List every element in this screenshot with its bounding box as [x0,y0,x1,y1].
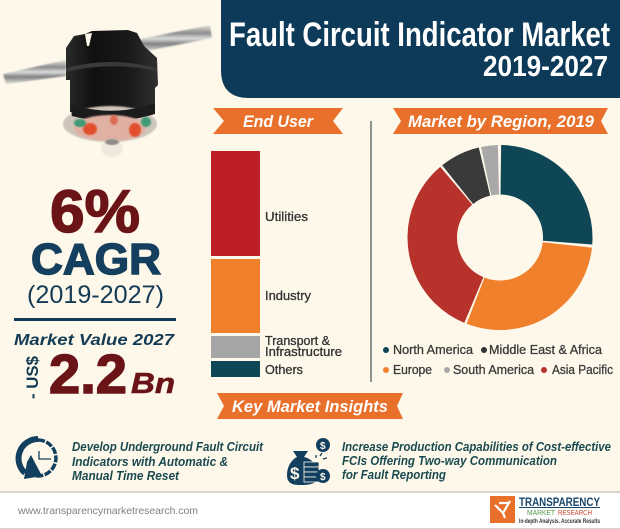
title text [229,16,610,83]
donut legend: Middle East & Africa [489,342,603,357]
stat: market value 2027 [14,332,175,405]
insight text: underground: Manual Time Reset [72,468,180,483]
stat: 6% CAGR: CAGR [31,235,161,284]
stat: 6% CAGR [27,178,164,309]
bar labels [265,210,342,377]
heading ribbon: End User [213,108,343,134]
donut legend: Europe [393,362,432,377]
stat: market value 2027: Market Value 2027 [14,332,175,349]
stat: 6% CAGR: 6% [50,178,140,245]
donut legend: Asia Pacific [552,362,613,377]
insight text: production capabilities: FCIs Offering Two-way Communication [342,453,557,468]
stat: market value 2027: 2.2 [49,343,127,405]
heading ribbon: Key Market Insights [217,393,403,419]
heading ribbon: Market by Region: Market by Region, 2019 [408,112,595,131]
device photo: fault circuit indicator [3,25,212,157]
bar labels: Infrastructure [265,345,342,359]
insight text: production capabilities: for Fault Reporting [342,467,446,482]
logo: TRANSPARENCY [519,495,600,509]
icon: money bag and coins [287,438,330,485]
bar labels: Utilities [265,210,308,224]
heading ribbon: Key Market Insights: Key Market Insights [232,397,388,416]
icon: money bag and coins: $ [320,472,326,483]
insight text: underground [72,439,264,483]
logo: MARKET [527,510,556,517]
icon: money bag and coins: $ [290,464,300,483]
bar labels: Industry [265,289,312,303]
insight text: production capabilities [342,439,611,482]
stacked bar: End User [211,151,342,377]
donut legend: North America [393,342,474,357]
donut chart: market by region [405,142,595,333]
stat: 6% CAGR: (2019-2027) [27,281,164,309]
logo: RESEARCH [558,510,592,517]
icon: money bag and coins: $ [320,441,326,452]
heading ribbon: Market by Region [393,108,608,134]
bar labels: Transport & [265,334,331,348]
insight text: underground: Develop Underground Fault Circuit [72,439,264,454]
stat: market value 2027: - US$ [23,355,42,399]
heading ribbon: End User: End User [243,112,314,131]
donut legend: South America [453,362,535,377]
insight text: underground: Indicators with Automatic & [72,454,228,469]
stat: market value 2027: Bn [131,368,175,400]
title text: 2019-2027 [483,51,608,83]
title banner [221,0,620,98]
logo: In-depth Analysis. Accurate Results [519,519,601,525]
logo [490,495,601,525]
footer [0,491,620,529]
website url: www.transparencymarketresearch.com [17,505,198,517]
donut legend [383,342,613,377]
icon: clock [19,439,56,479]
bar labels: Others [265,363,303,377]
